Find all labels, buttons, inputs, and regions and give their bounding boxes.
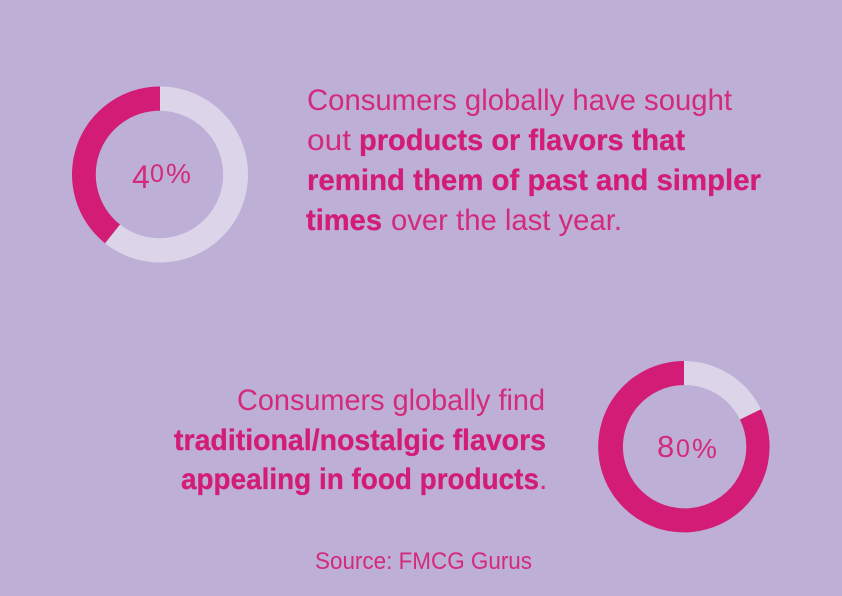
text block: bottom statement: appealing in food products: [181, 463, 539, 496]
text block: bottom statement: [174, 384, 547, 496]
text block: bottom statement: traditional/nostalgic flavors: [174, 424, 546, 457]
text block: top statement: products or flavors that: [359, 124, 685, 157]
donut chart: 40%: %: [166, 158, 191, 189]
text block: top statement: Consumers globally have sought: [307, 84, 733, 117]
text block: top statement: [306, 84, 761, 237]
donut chart: 80%: %: [692, 433, 717, 464]
donut chart: 40%: [72, 86, 248, 263]
text block: top statement: out: [307, 124, 352, 157]
text block: bottom statement: .: [539, 463, 547, 496]
text block: bottom statement: Consumers globally find: [237, 384, 545, 417]
source credit: Source: FMCG Gurus: [315, 548, 532, 575]
donut chart: 40%: 4: [132, 159, 150, 195]
text block: top statement: remind them of past and simpler: [307, 164, 761, 197]
donut chart: 80%: 8: [657, 429, 674, 464]
text block: top statement: times: [306, 204, 382, 237]
text block: top statement: over the last year.: [391, 204, 622, 237]
donut chart: 80%: [598, 361, 770, 532]
donut chart: 80%: 0: [676, 435, 690, 463]
donut chart: 40%: 0: [150, 160, 164, 188]
